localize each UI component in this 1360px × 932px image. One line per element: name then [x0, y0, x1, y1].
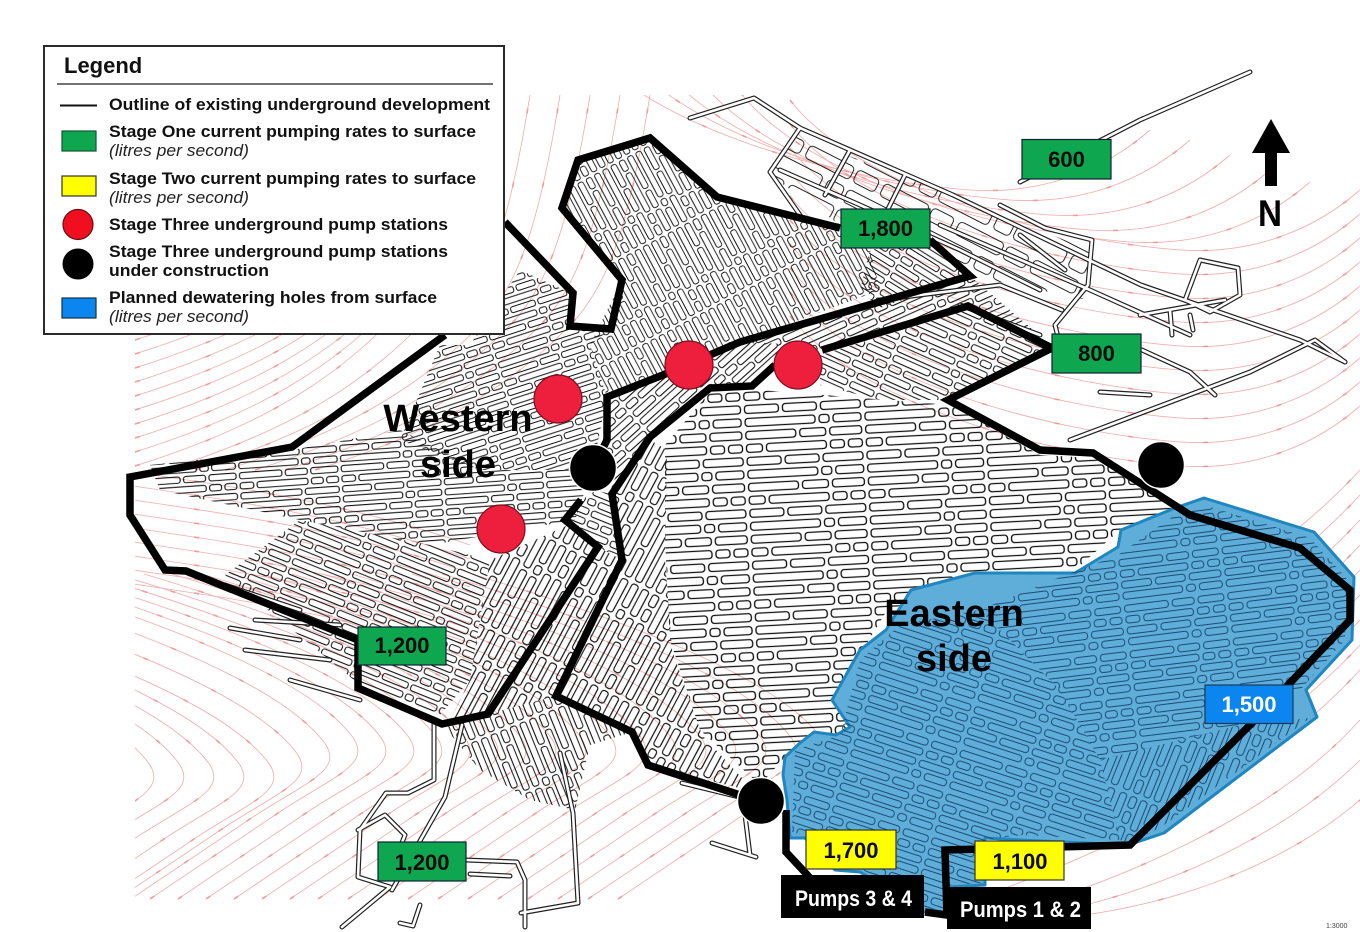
rate label: 1,500: [1205, 685, 1293, 724]
rate label: 1,200 south: [378, 842, 466, 881]
legend: dewatering holes: Planned dewatering holes from surface: [109, 288, 437, 307]
rate label: 600: 600: [1048, 147, 1085, 172]
label: Pumps 3 & 4: [781, 875, 924, 918]
rate label: 1,100: [975, 841, 1064, 880]
legend: stage one: Stage One current pumping rates to surface: [109, 122, 476, 141]
rate label: 800: 800: [1078, 341, 1115, 366]
pump station under construction: west: [570, 444, 616, 492]
rate label: 1,200 south: 1,200: [394, 850, 450, 875]
rate label: 800: [1052, 334, 1141, 373]
legend title: Legend: [64, 53, 142, 78]
pump station: red (north-east): [774, 341, 822, 389]
legend: stage two: (litres per second): [109, 188, 249, 207]
north arrow: N: [1258, 193, 1282, 234]
underground tunnels: northern side: [470, 135, 1090, 397]
legend: outline line: Outline of existing underground development: [109, 95, 490, 114]
heading: Western side: side: [420, 444, 496, 486]
rate label: 1,700: [806, 830, 896, 869]
outlying access tunnels: [225, 72, 1345, 927]
pump station: red (centre): [665, 341, 713, 389]
legend: dewatering holes: (litres per second): [109, 307, 249, 326]
legend: stage one: [62, 122, 476, 160]
pump station under construction: south: [738, 778, 784, 824]
heading: Eastern side: side: [916, 638, 992, 680]
outline: western side of underground development: [130, 138, 970, 724]
outline: eastern side of underground development: [556, 306, 1350, 915]
rate label: 1,700: 1,700: [823, 838, 879, 863]
north arrow: [1252, 119, 1290, 234]
rate label: 1,200 west: 1,200: [374, 633, 430, 658]
pump station: red (north-west): [534, 375, 582, 423]
heading: Western side: Western: [383, 398, 533, 440]
pump station: red (west): [477, 505, 525, 553]
label: Pumps 1 & 2: [947, 887, 1091, 929]
legend: stage two: Stage Two current pumping rates to surface: [109, 169, 476, 188]
legend panel: [44, 46, 504, 334]
rate label: 1,500: 1,500: [1221, 692, 1277, 717]
legend: pump stations under construction: under construction: [109, 261, 269, 280]
rate label: 1,200 west: [358, 627, 446, 665]
label: Pumps 3 & 4: Pumps 3 & 4: [795, 886, 913, 911]
rate label: 1,100: 1,100: [992, 849, 1048, 874]
heading: Eastern side: Eastern: [884, 593, 1024, 635]
legend: pump stations under construction: [62, 242, 448, 280]
label: Pumps 1 & 2: Pumps 1 & 2: [960, 897, 1081, 922]
underground tunnels: western side: [150, 345, 622, 720]
rate label: 600: [1022, 140, 1111, 179]
legend: stage two: [62, 169, 476, 207]
planned dewatering area (blue): [783, 498, 1354, 915]
rate label: 1,800: [841, 209, 930, 248]
rate label: 1,800: 1,800: [858, 216, 913, 241]
legend: pump stations under construction: Stage Three underground pump stations: [109, 242, 448, 261]
legend: stage three pump stations: [63, 210, 448, 240]
legend: stage three pump stations: Stage Three underground pump stations: [109, 215, 448, 234]
underground tunnels: southern side: [442, 696, 632, 810]
underground tunnels: central and eastern side: [556, 276, 1175, 792]
pump station under construction: east: [1138, 442, 1184, 488]
legend: stage one: (litres per second): [109, 141, 249, 160]
scale note: 1:3000: [1326, 923, 1348, 930]
legend: dewatering holes: [62, 288, 437, 326]
